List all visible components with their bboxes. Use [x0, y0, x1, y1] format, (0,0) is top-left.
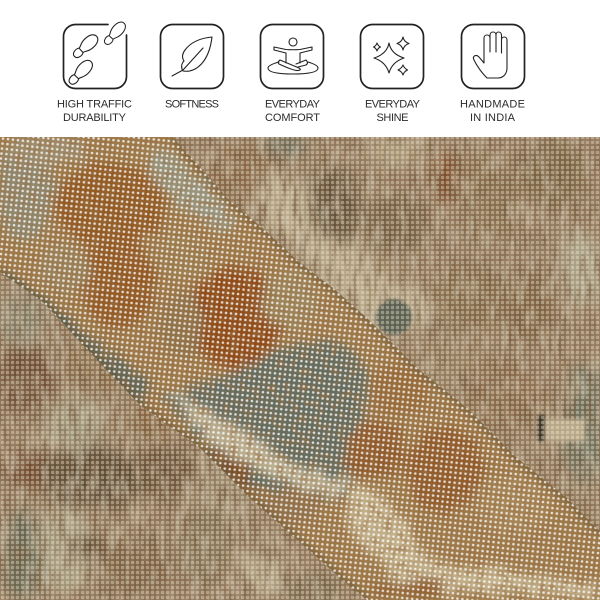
icon: feather [160, 24, 224, 88]
photo: rolled rug close-up [0, 132, 600, 600]
rolled rug foreground [0, 136, 600, 600]
label: handmade in india [460, 98, 525, 124]
icon: hand [462, 24, 524, 88]
label: everyday shine: EVERYDAY [365, 98, 421, 110]
label: handmade in india: HANDMADE [460, 98, 525, 110]
icon row [64, 19, 524, 88]
label: high traffic durability [57, 98, 132, 124]
label: everyday comfort: EVERYDAY [265, 98, 321, 110]
label: everyday comfort [265, 98, 321, 124]
label: handmade in india: IN INDIA [470, 112, 516, 124]
label: everyday shine [365, 98, 421, 124]
yarn colour variation [0, 137, 600, 600]
label: high traffic durability: HIGH TRAFFIC [57, 98, 132, 110]
cross motif, right edge [538, 415, 585, 441]
label: high traffic durability: DURABILITY [63, 112, 127, 124]
feature labels [57, 98, 525, 124]
icon: sparkles [360, 24, 424, 88]
green dot motif [376, 299, 412, 335]
label: everyday shine: SHINE [376, 112, 408, 124]
shaded roll edges [0, 137, 600, 600]
icon: footprints [64, 19, 128, 88]
rug background, out of focus [0, 132, 600, 600]
label: everyday comfort: COMFORT [265, 112, 320, 124]
icon: meditation figure [260, 24, 324, 88]
label: softness: SOFTNESS [165, 98, 219, 110]
vertical yarn streaks [0, 137, 600, 600]
